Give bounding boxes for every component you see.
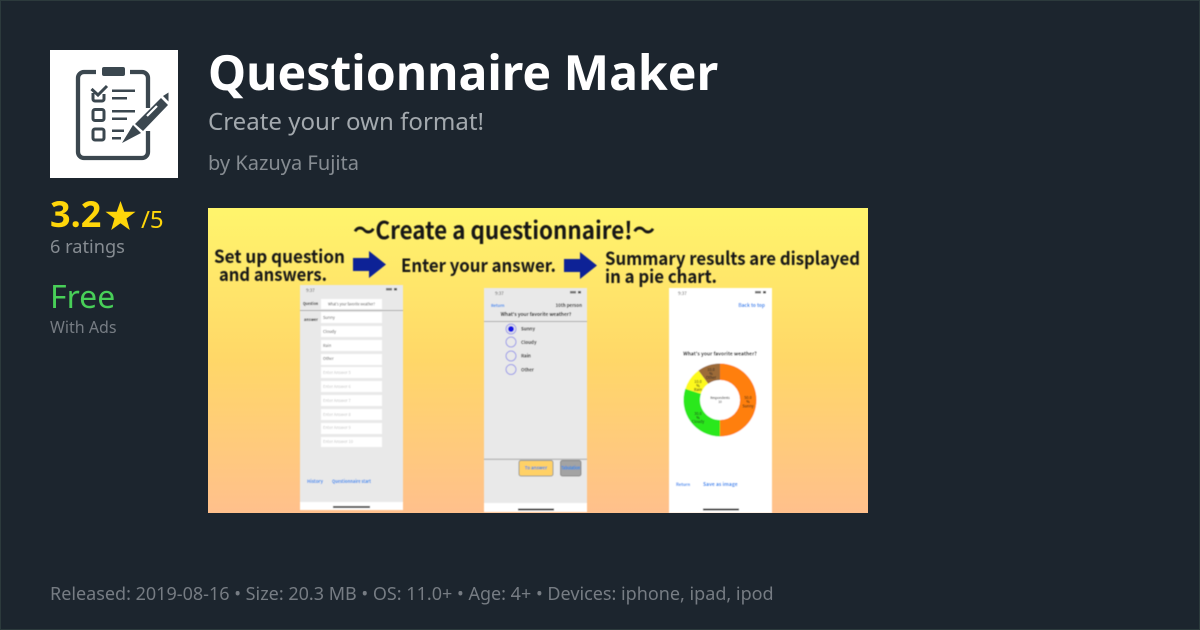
phone 1: setup form: What's your favorite weather? bbox=[328, 302, 375, 308]
phone 1: setup form: Enter Answer 7 bbox=[323, 398, 352, 404]
donut chart: % bbox=[746, 400, 750, 405]
phone 2: answer screen: 9:37 bbox=[495, 291, 504, 297]
step 3 caption: in a pie chart. bbox=[605, 263, 717, 289]
phone 1: setup form: Rain bbox=[323, 343, 332, 349]
footer metadata: Released: 2019-08-16 • Size: 20.3 MB • OS: 11.0+ • Age: 4+ • Devices: iphone, ipad, ipod bbox=[50, 582, 774, 606]
donut chart: Other bbox=[706, 375, 717, 381]
donut chart: Respondents bbox=[710, 395, 730, 400]
phone 3: result chart: What's your favorite weather? bbox=[683, 350, 757, 358]
phone 3: result chart: Save as image bbox=[703, 481, 738, 488]
icon: star bbox=[106, 201, 136, 230]
phone 2: answer screen: Tabulation bbox=[561, 464, 580, 472]
phone 1: setup form: Questionnaire start bbox=[332, 478, 371, 485]
phone 2: answer screen: Sunny bbox=[521, 326, 535, 332]
step 3 caption bbox=[605, 245, 860, 289]
phone 3: result chart: Back to top bbox=[738, 302, 765, 309]
phone 1: setup form: Enter Answer 9 bbox=[323, 425, 351, 431]
rating: 3.2 bbox=[50, 189, 101, 238]
rating: /5 bbox=[141, 203, 164, 236]
arrow 1 bbox=[353, 251, 386, 278]
phone 1: setup form: Other bbox=[323, 356, 334, 362]
phone 2: answer screen: Cloudy bbox=[521, 340, 537, 346]
phone 2: answer screen: Other bbox=[521, 368, 534, 374]
donut chart: 10.0 bbox=[694, 380, 702, 385]
donut chart: 50.0 bbox=[744, 396, 752, 401]
developer: by Kazuya Fujita bbox=[208, 149, 359, 176]
donut chart bbox=[684, 364, 756, 436]
phone 1: setup form bbox=[300, 285, 403, 510]
ads note: With Ads bbox=[50, 316, 117, 338]
phone 2: answer screen: What's your favorite weather? bbox=[501, 311, 572, 318]
donut chart: % bbox=[696, 384, 700, 389]
phone 1: setup form: Enter Answer 5 bbox=[323, 370, 351, 376]
phone 3: result chart: Return bbox=[676, 482, 690, 488]
donut chart: Rain bbox=[694, 387, 702, 393]
phone 2: answer screen: To answer bbox=[525, 466, 547, 472]
arrow 2 bbox=[564, 252, 597, 279]
subtitle: Create your own format! bbox=[208, 105, 484, 138]
donut chart: 30.0 bbox=[694, 412, 702, 417]
phone 3: result chart bbox=[669, 288, 772, 513]
phone 2: answer screen: Rain bbox=[521, 352, 531, 360]
price: Free bbox=[50, 275, 115, 318]
step 1 caption bbox=[214, 243, 345, 287]
step 2 caption: Enter your answer. bbox=[401, 252, 556, 278]
donut chart: Cloudy bbox=[692, 419, 704, 425]
donut chart: 10 bbox=[718, 399, 722, 404]
phone 1: setup form: Enter Answer 8 bbox=[323, 412, 352, 418]
phone 1: setup form: Enter Answer 10 bbox=[323, 439, 354, 445]
rating bbox=[50, 189, 164, 238]
ratings count: 6 ratings bbox=[50, 235, 125, 259]
phone 1: setup form: Enter Answer 6 bbox=[323, 384, 352, 390]
screenshot bbox=[208, 208, 868, 513]
phone 2: answer screen: Return bbox=[491, 303, 505, 309]
phone 2: answer screen bbox=[484, 288, 587, 512]
title: Questionnaire Maker bbox=[208, 39, 718, 105]
phone 1: setup form: 9:37 bbox=[306, 288, 315, 294]
donut chart: % bbox=[709, 372, 713, 377]
step 1 caption: and answers. bbox=[219, 261, 327, 287]
phone 1: setup form: Sunny bbox=[323, 315, 336, 321]
donut chart: % bbox=[696, 416, 700, 421]
donut chart: Sunny bbox=[742, 404, 754, 410]
donut chart: 10.0 bbox=[707, 368, 715, 373]
phone 2: answer screen: 10th person bbox=[556, 303, 582, 309]
phone 1: setup form: Cloudy bbox=[323, 329, 337, 335]
icon: app clipboard bbox=[50, 50, 178, 178]
phone 1: setup form: Question bbox=[303, 301, 318, 307]
step 1 caption: Set up question bbox=[214, 243, 345, 269]
phone 1: setup form: answer bbox=[304, 318, 318, 323]
phone 3: result chart: 9:37 bbox=[678, 291, 687, 297]
heading text: 〜Create a questionnaire!〜 bbox=[353, 211, 655, 246]
phone 1: setup form: History bbox=[307, 478, 324, 485]
